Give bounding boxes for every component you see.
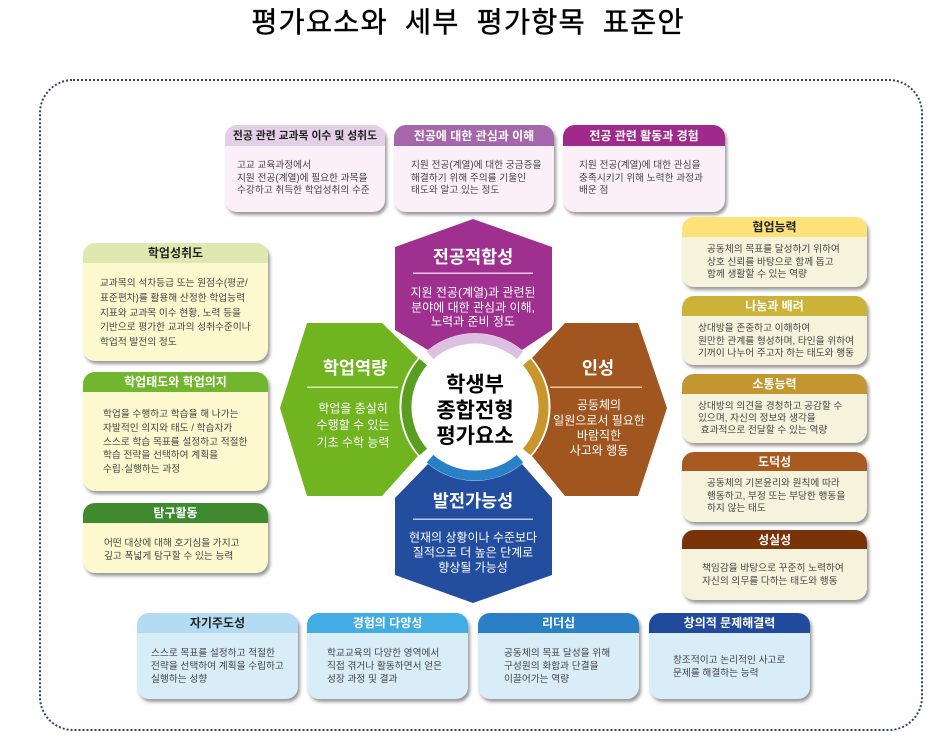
card: 학업태도와 학업의지: 학습 전략을 선택하여 계획을 (103, 450, 218, 461)
card: 소통능력: 상대방의 의견을 경청하고 공감할 수 (698, 401, 842, 412)
card: 전공 관련 활동과 경험: 전공 관련 활동과 경험 (589, 129, 699, 143)
card: 경험의 다양성 (307, 613, 468, 699)
card: 자기주도성: 스스로 목표를 설정하고 적절한 (151, 648, 275, 659)
card: 리더십: 구성원의 화합과 단결을 (504, 661, 599, 672)
card: 전공 관련 교과목 이수 및 성취도: 지원 전공(계열)에 필요한 과목을 (237, 173, 367, 184)
card: 협업능력: 공동체의 목표를 달성하기 위하여 (707, 244, 840, 255)
card: 협업능력: 협업능력 (752, 220, 797, 234)
card: 전공 관련 교과목 이수 및 성취도: 수강하고 취득한 학업성취의 수준 (237, 185, 370, 196)
hexagon: 발전가능성 (395, 464, 552, 603)
card: 성실성: 책임감을 바탕으로 꾸준히 노력하여 (702, 563, 844, 574)
hexagon: 전공적합성: 전공적합성 (433, 247, 513, 267)
hexagon: 전공적합성: 지원 전공(계열)과 관련된 (410, 286, 536, 300)
card: 경험의 다양성: 직접 겪거나 활동하면서 얻은 (327, 661, 442, 672)
center ring and label: 종합전형 (436, 400, 514, 422)
card: 자기주도성: 자기주도성 (190, 616, 245, 630)
hexagon: 인성: 일원으로서 필요한 (553, 414, 645, 428)
card: 창의적 문제해결력: 문제를 해결하는 능력 (673, 668, 759, 679)
card: 전공 관련 활동과 경험: 지원 전공(계열)에 대한 관심을 (579, 160, 700, 171)
card: 성실성: 자신의 의무를 다하는 태도와 행동 (702, 576, 838, 587)
card: 창의적 문제해결력 (649, 613, 810, 699)
hexagon: 학업역량: 학업을 충실히 (318, 402, 388, 416)
card: 도덕성: 하지 않는 태도 (707, 503, 766, 514)
card: 소통능력 (682, 374, 867, 443)
card: 도덕성: 공동체의 기본윤리와 원칙에 따라 (707, 478, 840, 489)
card: 전공에 대한 관심과 이해: 지원 전공(계열)에 대한 궁금증을 (411, 160, 541, 171)
card: 학업성취도: 학업적 발전의 정도 (100, 337, 177, 348)
card: 리더십: 공동체의 목표 달성을 위해 (504, 648, 610, 659)
hexagon: 전공적합성 (395, 219, 552, 350)
hexagon: 학업역량: 수행할 수 있는 (317, 417, 389, 432)
card: 전공에 대한 관심과 이해: 전공에 대한 관심과 이해 (414, 129, 534, 143)
card: 도덕성 (682, 452, 867, 522)
hexagon: 전공적합성: 분야에 대한 관심과 이해, (411, 300, 535, 314)
hexagon: 인성: 공동체의 (577, 398, 621, 412)
card: 소통능력: 효과적으로 전달할 수 있는 역량 (701, 425, 827, 436)
card: 성실성: 성실성 (758, 533, 791, 547)
hexagon: 전공적합성: 노력과 준비 정도 (431, 314, 515, 328)
card: 자기주도성 (137, 613, 298, 699)
card: 학업태도와 학업의지: 학업태도와 학업의지 (124, 375, 227, 389)
card: 학업태도와 학업의지: 학업을 수행하고 학습을 해 나가는 (103, 409, 239, 420)
card: 전공에 대한 관심과 이해: 태도와 알고 있는 정도 (411, 185, 499, 196)
card: 학업태도와 학업의지: 수립·실행하는 과정 (103, 464, 180, 475)
card: 탐구활동: 깊고 폭넓게 탐구할 수 있는 능력 (104, 551, 233, 562)
card: 탐구활동: 어떤 대상에 대해 호기심을 가지고 (104, 538, 240, 549)
card: 성실성 (682, 530, 867, 600)
center ring and label: 학생부 (446, 374, 504, 396)
card: 학업태도와 학업의지 (83, 372, 268, 491)
card: 학업성취도: 지표와 교과목 이수 현황, 노력 등을 (100, 308, 241, 319)
card: 협업능력: 함께 생활할 수 있는 역량 (707, 269, 807, 280)
card: 전공 관련 교과목 이수 및 성취도: 전공 관련 교과목 이수 및 성취도 (233, 130, 377, 142)
card: 전공 관련 교과목 이수 및 성취도 (225, 125, 385, 212)
card: 소통능력: 소통능력 (752, 377, 797, 391)
card: 도덕성: 행동하고, 부정 또는 부당한 행동을 (707, 491, 845, 502)
card: 협업능력 (682, 217, 867, 287)
hexagon: 발전가능성: 발전가능성 (433, 491, 513, 511)
card: 학업성취도: 교과목의 석차등급 또는 원점수(평균/ (100, 278, 248, 289)
card: 리더십: 이끌어가는 역량 (504, 674, 569, 685)
hexagon: 인성: 사고와 행동 (570, 442, 628, 458)
card: 학업성취도: 기반으로 평가한 교과의 성취수준이나 (100, 322, 251, 333)
card: 자기주도성: 실행하는 성향 (151, 674, 207, 685)
hexagon: 학업역량: 학업역량 (323, 358, 387, 378)
hexagon: 인성: 바람직한 (577, 428, 621, 442)
card: 나눔과 배려: 상대방을 존중하고 이해하여 (698, 323, 810, 334)
card: 전공 관련 교과목 이수 및 성취도: 고교 교육과정에서 (237, 160, 311, 171)
card: 전공 관련 활동과 경험 (563, 125, 725, 212)
card: 학업태도와 학업의지: 자발적인 의지와 태도 / 학습자가 (103, 423, 232, 434)
card: 전공에 대한 관심과 이해: 해결하기 위해 주의를 기울인 (411, 173, 526, 184)
card: 탐구활동: 탐구활동 (153, 506, 198, 520)
card: 도덕성: 도덕성 (758, 455, 791, 469)
card: 탐구활동 (83, 503, 268, 573)
hexagon: 학업역량: 기초 수학 능력 (317, 436, 389, 450)
center ring and label (406, 338, 544, 476)
card: 학업성취도: 학업성취도 (148, 246, 203, 260)
card: 창의적 문제해결력: 창의적 문제해결력 (684, 616, 775, 630)
card: 소통능력: 있으며, 자신의 정보와 생각을 (698, 413, 816, 424)
center ring and label: 평가요소 (436, 425, 514, 448)
hexagon: 발전가능성: 향상될 가능성 (438, 560, 508, 574)
card: 나눔과 배려 (682, 296, 867, 365)
card: 자기주도성: 전략을 선택하여 계획을 수립하고 (151, 661, 284, 672)
hexagon: 인성 (532, 323, 667, 496)
card: 전공에 대한 관심과 이해 (394, 125, 554, 212)
card: 경험의 다양성: 성장 과정 및 결과 (327, 674, 397, 685)
card: 학업태도와 학업의지: 스스로 학습 목표를 설정하고 적절한 (103, 437, 247, 448)
card: 경험의 다양성: 경험의 다양성 (353, 616, 422, 630)
card: 리더십 (478, 613, 639, 699)
hexagon: 발전가능성: 질적으로 더 높은 단계로 (413, 546, 533, 560)
card: 전공 관련 활동과 경험: 충족시키기 위해 노력한 과정과 (579, 173, 703, 184)
card: 나눔과 배려: 원만한 관계를 형성하며, 타인을 위하여 (698, 336, 854, 347)
hexagon: 인성: 인성 (582, 358, 614, 378)
card: 학업성취도 (83, 243, 268, 361)
card: 나눔과 배려: 나눔과 배려 (745, 299, 804, 313)
card: 창의적 문제해결력: 창조적이고 논리적인 사고로 (673, 655, 785, 666)
title: 평가요소와 세부 평가항목 표준안 (251, 7, 685, 39)
card: 리더십: 리더십 (542, 616, 575, 630)
card: 나눔과 배려: 기꺼이 나누어 주고자 하는 태도와 행동 (698, 348, 854, 359)
card: 전공 관련 활동과 경험: 배운 점 (579, 185, 608, 196)
hexagon: 학업역량 (280, 323, 418, 496)
card: 학업성취도: 표준편차)를 활용해 산정한 학업능력 (100, 293, 245, 304)
card: 경험의 다양성: 학교교육의 다양한 영역에서 (327, 648, 439, 659)
hexagon: 발전가능성: 현재의 상황이나 수준보다 (409, 530, 537, 544)
card: 협업능력: 상호 신뢰를 바탕으로 함께 돕고 (707, 257, 834, 268)
